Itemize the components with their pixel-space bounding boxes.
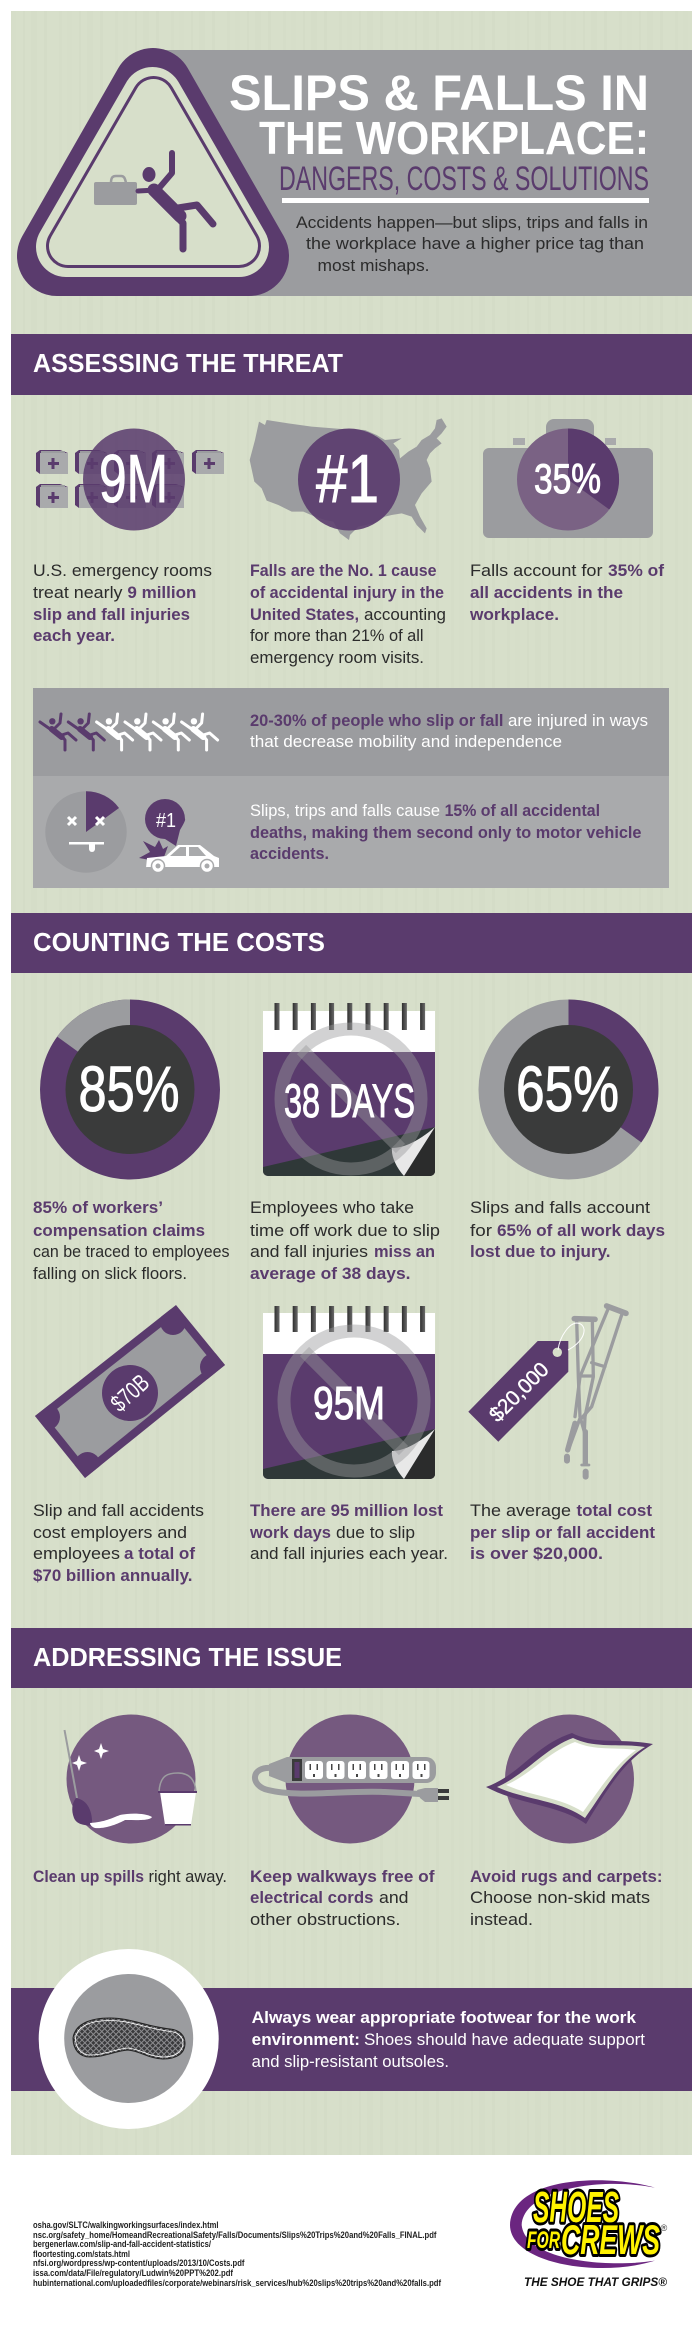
stat: 35 percent: 35% xyxy=(534,455,601,502)
icon: power strip xyxy=(255,1757,449,1802)
text: 9 million: 9 million xyxy=(127,584,196,602)
text: footwear: Shoes should have adequate support xyxy=(364,2031,645,2049)
stat: number one xyxy=(250,418,447,667)
text: 9 million: treat nearly xyxy=(33,584,123,602)
stat: 70 billion banknote xyxy=(33,1305,228,1585)
icon: first aid kits xyxy=(36,450,224,508)
text: 65 percent: 65% of all work days xyxy=(497,1222,665,1240)
icon: car crash: #1 xyxy=(156,810,176,832)
text: 35 percent: workplace. xyxy=(469,606,559,624)
title xyxy=(229,65,649,164)
text: sources: nsc.org/safety_home/HomeandRecreationalSafety/Falls/Documents/Slips%20Trips%20and%20Falls_FINAL.pdf xyxy=(33,2230,437,2240)
text: 70 billion: $70 billion annually. xyxy=(33,1567,192,1585)
text: 35 percent: 35% of xyxy=(608,562,665,580)
icon: falling figures xyxy=(40,714,218,750)
text: sources: hubinternational.com/uploadedfiles/corporate/webinars/risk_services/hub%20slips%20trips%20and%20falls.pdf xyxy=(33,2278,442,2288)
icon: bucket xyxy=(158,1773,197,1826)
text: sources: osha.gov/SLTC/walkingworkingsurfaces/index.html xyxy=(33,2220,218,2230)
text: sources: issa.com/data/File/regulatory/Ludwin%20PPT%202.pdf xyxy=(33,2268,234,2278)
text: 35 percent: all accidents in the xyxy=(470,584,623,602)
text: mobility: are injured in ways xyxy=(508,712,648,730)
text: 20000: per slip or fall accident xyxy=(470,1524,656,1542)
title: THE WORKPLACE: xyxy=(259,112,649,164)
icon: camera xyxy=(483,419,653,538)
rings xyxy=(274,1003,425,1030)
logo: shoes for crews: THE SHOE THAT GRIPS® xyxy=(524,2275,667,2289)
text: footwear: and slip-resistant outsoles. xyxy=(252,2053,449,2071)
text: 70 billion: cost employers and xyxy=(33,1524,187,1542)
text: 95 million xyxy=(249,1502,448,1563)
stat: 70 billion banknote: $70B xyxy=(106,1369,155,1417)
stat: number one: #1 xyxy=(316,441,379,517)
calendar: 95 million: 95M xyxy=(313,1377,385,1429)
text: 85 percent: compensation claims xyxy=(33,1222,205,1240)
text: 20000: is over $20,000. xyxy=(470,1545,603,1563)
text: electrical cords: other obstructions. xyxy=(250,1911,400,1929)
text: 35 percent: Falls account for xyxy=(470,562,603,580)
text: 38 days: Employees who take xyxy=(250,1199,414,1217)
intro text: most mishaps. xyxy=(318,257,430,275)
section header: addressing the issue xyxy=(11,1628,692,1688)
text: 35 percent xyxy=(469,562,665,624)
stat: 85 percent donut xyxy=(33,1000,230,1283)
intro text: Accidents happen—but slips, trips and falls in xyxy=(296,214,648,232)
icon: face pie chart xyxy=(45,791,127,873)
text: rugs and carpets: Choose non-skid mats xyxy=(470,1889,650,1907)
icon: car crash xyxy=(139,799,219,872)
text: sources: floortesting.com/stats.html xyxy=(33,2249,130,2259)
icon: no symbol xyxy=(281,1029,421,1169)
section header: addressing the issue: ADDRESSING THE ISSUE xyxy=(33,1644,342,1672)
icon: rug xyxy=(486,1733,653,1824)
stat: 35 percent xyxy=(469,419,665,624)
text: 20000: total cost xyxy=(576,1502,653,1520)
panel: mobility xyxy=(33,688,669,776)
text: number one cause: emergency room visits. xyxy=(250,649,424,667)
text: clean up spills: Clean up spills xyxy=(33,1868,144,1886)
panel: footwear xyxy=(11,1949,692,2129)
text: 38 days xyxy=(250,1199,440,1283)
icon: falling figure xyxy=(138,153,213,249)
text: 65 percent: for xyxy=(470,1222,493,1240)
text: 65 percent: Slips and falls account xyxy=(470,1199,651,1217)
icon: US map xyxy=(250,418,447,540)
text: mobility xyxy=(250,712,648,751)
text: 70 billion: employees xyxy=(33,1545,120,1563)
header banner xyxy=(150,50,692,296)
section header: counting the costs xyxy=(11,913,692,973)
text: footwear: environment: xyxy=(252,2031,360,2049)
tip: clean up spills xyxy=(33,1714,227,1886)
icon: briefcase xyxy=(94,176,137,205)
intro text: the workplace have a higher price tag than xyxy=(306,235,644,253)
logo: shoes for crews: ® xyxy=(661,2223,668,2233)
title: SLIPS & FALLS IN xyxy=(229,65,649,121)
text: number one cause: Falls are the No. 1 cause xyxy=(250,562,436,580)
stat: 65 percent donut xyxy=(470,1000,665,1261)
section header: assessing the threat xyxy=(11,334,692,395)
section header: assessing the threat: ASSESSING THE THREAT xyxy=(33,350,343,378)
text: 70 billion: a total of xyxy=(124,1545,196,1563)
text: 85 percent: can be traced to employees xyxy=(33,1243,230,1261)
text: footwear xyxy=(252,2009,645,2071)
logo: shoes for crews: SHOES xyxy=(533,2183,619,2232)
text: rugs and carpets xyxy=(470,1868,662,1929)
text: sources xyxy=(33,2220,442,2288)
text: accidental deaths: accidents. xyxy=(250,845,329,863)
text: 38 days: miss an xyxy=(374,1243,435,1261)
tip: rugs and carpets xyxy=(470,1714,662,1929)
calendar: 38 days xyxy=(250,1003,440,1283)
calendar: 38 days: 38 DAYS xyxy=(284,1074,415,1127)
text: footwear: Always wear appropriate footwear for the work xyxy=(252,2009,637,2027)
tip: electrical cords xyxy=(250,1714,449,1929)
text: 95 million: due to slip xyxy=(336,1524,415,1542)
text: 38 days: and fall injuries xyxy=(250,1243,368,1261)
text: sources: bergenerlaw.com/slip-and-fall-accident-statistics/ xyxy=(33,2239,211,2249)
text: accidental deaths: deaths, making them second only to motor vehicle xyxy=(250,824,642,842)
text: 9 million: each year. xyxy=(33,627,115,645)
logo: shoes for crews: FOR xyxy=(527,2227,560,2254)
text: 38 days: average of 38 days. xyxy=(250,1265,410,1283)
text: accidental deaths: 15% of all accidental xyxy=(445,802,600,820)
text: 20000 xyxy=(470,1502,656,1563)
icon: price tag xyxy=(468,1323,584,1442)
text: 70 billion xyxy=(33,1502,204,1585)
text: electrical cords: electrical cords xyxy=(250,1889,374,1907)
calendar: 95 million xyxy=(249,1306,448,1563)
text: electrical cords: and xyxy=(379,1889,408,1907)
text: 9 million: U.S. emergency rooms xyxy=(33,562,212,580)
intro text xyxy=(296,214,648,275)
logo: shoes for crews xyxy=(510,2180,668,2289)
text: number one cause xyxy=(250,562,446,667)
text: 85 percent: 85% of workers’ xyxy=(33,1199,163,1217)
icon: crutches xyxy=(567,1306,626,1477)
text: 20000: The average xyxy=(470,1502,571,1520)
text: mobility: 20-30% of people who slip or fall xyxy=(250,712,504,730)
text: accidental deaths xyxy=(250,802,642,863)
text: rugs and carpets: Avoid rugs and carpets: xyxy=(470,1868,662,1886)
text: number one cause: of accidental injury in the xyxy=(250,584,444,602)
text: 95 million: There are 95 million lost xyxy=(250,1502,444,1520)
text: 70 billion: Slip and fall accidents xyxy=(33,1502,204,1520)
icon: price tag: $20,000 xyxy=(485,1358,554,1427)
text: 9 million: slip and fall injuries xyxy=(33,606,190,624)
text: rugs and carpets: instead. xyxy=(470,1911,533,1929)
text: 85 percent xyxy=(33,1199,230,1283)
text: number one cause: United States, xyxy=(250,606,359,624)
text: clean up spills: right away. xyxy=(148,1868,227,1886)
text: accidental deaths: Slips, trips and falls cause xyxy=(250,802,440,820)
section header: counting the costs: COUNTING THE COSTS xyxy=(33,929,325,957)
panel: accidental deaths xyxy=(33,776,669,888)
icon: no symbol xyxy=(284,1331,424,1471)
text: 9 million xyxy=(33,562,212,645)
stat: 9M xyxy=(33,428,224,645)
icon: mop xyxy=(64,1730,152,1828)
icon: shoe sole xyxy=(73,2018,185,2059)
text: 65 percent xyxy=(470,1199,665,1261)
warning triangle icon xyxy=(57,88,249,256)
stat: 65 percent donut: 65% xyxy=(516,1053,619,1125)
stat: 20000 crutches and tag xyxy=(468,1306,656,1563)
text: number one cause: accounting xyxy=(364,606,446,624)
stat: 85 percent donut: 85% xyxy=(78,1053,180,1125)
text: clean up spills xyxy=(33,1868,227,1886)
text: sources: nfsi.org/wordpress/wp-content/uploads/2013/10/Costs.pdf xyxy=(33,2258,245,2268)
text: electrical cords: Keep walkways free of xyxy=(250,1868,435,1886)
text: electrical cords xyxy=(250,1868,435,1929)
text: 65 percent: lost due to injury. xyxy=(470,1243,610,1261)
text: 85 percent: falling on slick floors. xyxy=(33,1265,187,1283)
text: 95 million: and fall injuries each year. xyxy=(250,1545,448,1563)
rings xyxy=(274,1306,425,1332)
stat: 9M: 9M xyxy=(99,441,168,517)
text: number one cause: for more than 21% of all xyxy=(250,627,424,645)
text: 38 days: time off work due to slip xyxy=(250,1222,440,1240)
text: 95 million: work days xyxy=(249,1524,331,1542)
text: mobility: that decrease mobility and independence xyxy=(250,733,562,751)
